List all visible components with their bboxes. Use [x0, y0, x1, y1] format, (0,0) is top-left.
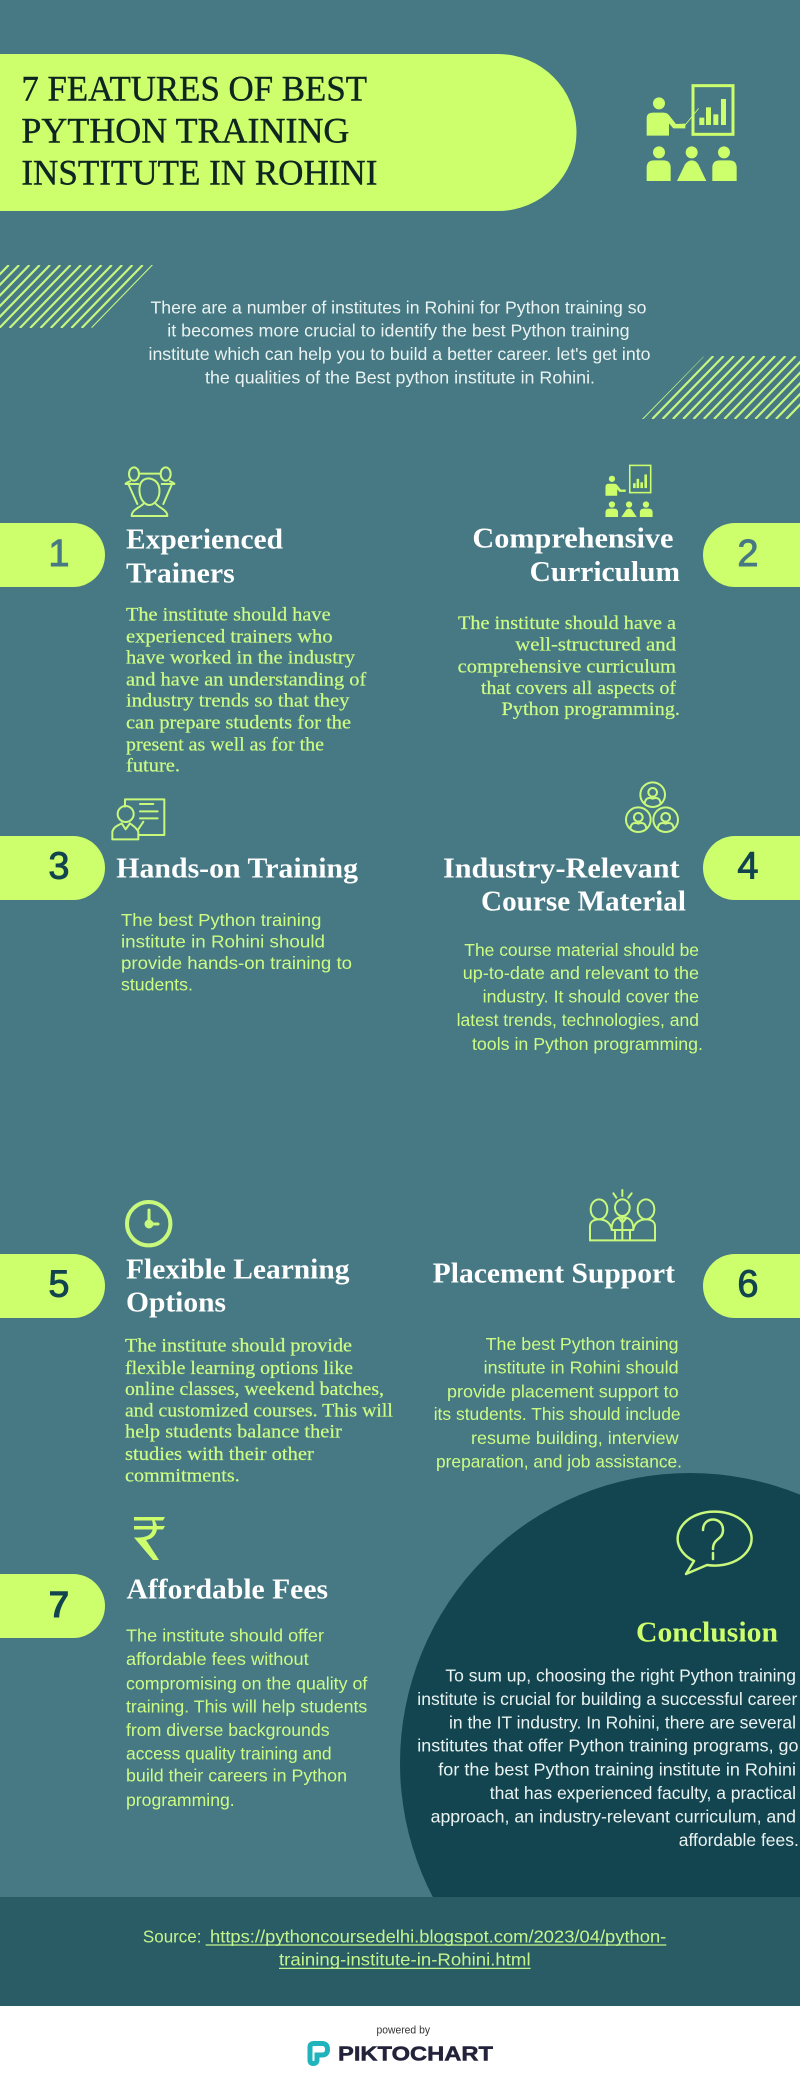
body text: and have an understanding of: [126, 670, 367, 691]
logo mark: [310, 2044, 328, 2064]
decorative hatch left: [0, 265, 153, 328]
body text: students.: [121, 975, 193, 995]
intro text: [148, 297, 650, 387]
body text: latest trends, technologies, and: [457, 1010, 699, 1030]
body text: well-structured and: [515, 635, 677, 656]
body text: The course material should be: [464, 940, 699, 960]
body text: that covers all aspects of: [481, 678, 677, 699]
body text: [458, 613, 680, 720]
number 4: 4: [737, 846, 759, 888]
source text: Source:: [143, 1926, 202, 1946]
body text: [126, 605, 367, 777]
panel: feature 1: [0, 467, 367, 777]
body text: have worked in the industry: [126, 647, 356, 668]
body text: The best Python training: [121, 910, 321, 930]
body text: commitments.: [125, 1466, 240, 1487]
body text: training. This will help students: [126, 1696, 368, 1716]
wordmark: PIKTOCHART: [338, 2044, 493, 2066]
powered by Piktochart: powered by: [376, 2024, 430, 2036]
body text: from diverse backgrounds: [126, 1720, 330, 1740]
conclusion text: institute is crucial for building a successful career: [417, 1689, 798, 1709]
source text: [143, 1926, 666, 1970]
number pill 2: [703, 523, 800, 587]
panel: feature 3: [0, 799, 359, 995]
icon: connected people: [626, 782, 678, 832]
body text: [121, 910, 352, 995]
body text: provide placement support to: [447, 1381, 679, 1401]
body text: [457, 940, 703, 1054]
body text: studies with their other: [125, 1444, 315, 1465]
conclusion text: for the best Python training institute in Rohini: [438, 1760, 796, 1780]
decorative hatch right: [642, 356, 800, 419]
panel: conclusion: [400, 1473, 800, 1897]
body text: and customized courses. This will: [125, 1401, 393, 1422]
icon: trainer with document: [112, 799, 164, 839]
title banner: [0, 54, 576, 211]
body text: online classes, weekend batches,: [125, 1379, 384, 1400]
source text: training-institute-in-Rohini.html: [279, 1950, 531, 1970]
icon: presenter small: [605, 465, 653, 517]
number 5: 5: [48, 1264, 70, 1306]
title banner: 7 FEATURES OF BEST: [21, 69, 367, 109]
body text: [126, 1626, 368, 1810]
heading: Options: [126, 1287, 226, 1319]
heading: Course Material: [481, 886, 686, 918]
conclusion text: approach, an industry-relevant curriculum, and: [431, 1806, 796, 1826]
body text: [125, 1336, 393, 1487]
body text: affordable fees without: [126, 1649, 309, 1669]
title banner: INSTITUTE IN ROHINI: [21, 152, 377, 192]
body text: can prepare students for the: [126, 713, 351, 734]
heading: Affordable Fees: [126, 1573, 328, 1605]
icon: team meeting: [590, 1190, 655, 1240]
body text: The best Python training: [486, 1334, 679, 1354]
body text: help students balance their: [125, 1422, 343, 1443]
conclusion text: institutes that offer Python training programs, go: [417, 1736, 798, 1756]
panel: feature 6: [433, 1190, 800, 1471]
number 6: 6: [737, 1264, 759, 1306]
body text: industry trends so that they: [126, 691, 350, 712]
body text: comprehensive curriculum: [458, 656, 676, 677]
intro text: the qualities of the Best python institute in Rohini.: [205, 367, 595, 387]
body text: The institute should offer: [126, 1626, 324, 1646]
footer source band: [0, 1897, 800, 2006]
body text: industry. It should cover the: [483, 987, 699, 1007]
icon: clock: [127, 1202, 170, 1245]
body text: The institute should have: [126, 605, 331, 626]
icon: trainers: [126, 467, 174, 516]
number pill 7: [0, 1574, 105, 1638]
body text: compromising on the quality of: [126, 1673, 367, 1693]
body text: Python programming.: [502, 699, 680, 720]
panel: feature 7: [0, 1517, 368, 1810]
dark circle: [400, 1473, 800, 1897]
body text: experienced trainers who: [126, 627, 333, 648]
body text: its students. This should include: [434, 1404, 681, 1424]
intro text: it becomes more crucial to identify the best Python training: [167, 321, 630, 341]
number 1: 1: [48, 533, 70, 575]
conclusion heading: Conclusion: [636, 1617, 778, 1649]
title banner: PYTHON TRAINING: [21, 110, 349, 150]
icon: presenter with audience: [647, 86, 737, 181]
conclusion text: To sum up, choosing the right Python training: [445, 1666, 796, 1686]
conclusion text: affordable fees.: [679, 1830, 799, 1850]
source text: https://pythoncoursedelhi.blogspot.com/2023/04/python-: [210, 1926, 666, 1946]
heading: [443, 852, 686, 918]
heading: Hands-on Training: [116, 852, 359, 884]
white footer: [0, 2006, 800, 2086]
conclusion text: [417, 1666, 799, 1850]
body text: resume building, interview: [471, 1428, 679, 1448]
number pill 1: [0, 523, 105, 587]
body text: programming.: [126, 1790, 235, 1810]
icon: speech bubble question: [678, 1512, 752, 1574]
heading: [472, 522, 680, 588]
conclusion text: that has experienced faculty, a practical: [490, 1783, 796, 1803]
powered by Piktochart: [310, 2024, 493, 2066]
body text: tools in Python programming.: [472, 1034, 703, 1054]
conclusion text: in the IT industry. In Rohini, there are several: [449, 1712, 796, 1732]
body text: institute in Rohini should: [484, 1357, 679, 1377]
panel: feature 2: [458, 465, 800, 720]
body text: present as well as for the: [126, 735, 324, 756]
body text: flexible learning options like: [125, 1358, 353, 1379]
number pill 4: [703, 836, 800, 900]
body text: provide hands-on training to: [121, 953, 352, 973]
body text: The institute should have a: [458, 613, 677, 634]
number pill 3: [0, 836, 105, 900]
number pill 6: [703, 1254, 800, 1318]
body text: build their careers in Python: [126, 1766, 347, 1786]
panel: feature 4: [443, 782, 800, 1054]
body text: preparation, and job assistance.: [436, 1451, 682, 1471]
body text: future.: [126, 756, 180, 777]
heading: Experienced: [126, 523, 283, 555]
heading: Trainers: [126, 557, 235, 589]
body text: [434, 1334, 682, 1471]
body text: up-to-date and relevant to the: [463, 963, 699, 983]
body text: access quality training and: [126, 1743, 332, 1763]
heading: Placement Support: [433, 1257, 675, 1289]
number 3: 3: [48, 846, 70, 888]
heading: [126, 523, 283, 589]
panel: feature 5: [0, 1202, 393, 1487]
body text: The institute should provide: [125, 1336, 352, 1357]
heading: Comprehensive: [472, 522, 674, 554]
heading: Flexible Learning: [126, 1253, 350, 1285]
number pill 5: [0, 1254, 105, 1318]
heading: [126, 1253, 350, 1319]
number 7: 7: [48, 1584, 70, 1626]
heading: Industry-Relevant: [443, 852, 680, 884]
number 2: 2: [737, 533, 759, 575]
body text: institute in Rohini should: [121, 932, 325, 952]
heading: Curriculum: [530, 556, 680, 588]
intro text: institute which can help you to build a better career. let's get into: [148, 344, 650, 364]
icon: rupee: [134, 1517, 165, 1560]
intro text: There are a number of institutes in Rohini for Python training so: [150, 297, 646, 317]
